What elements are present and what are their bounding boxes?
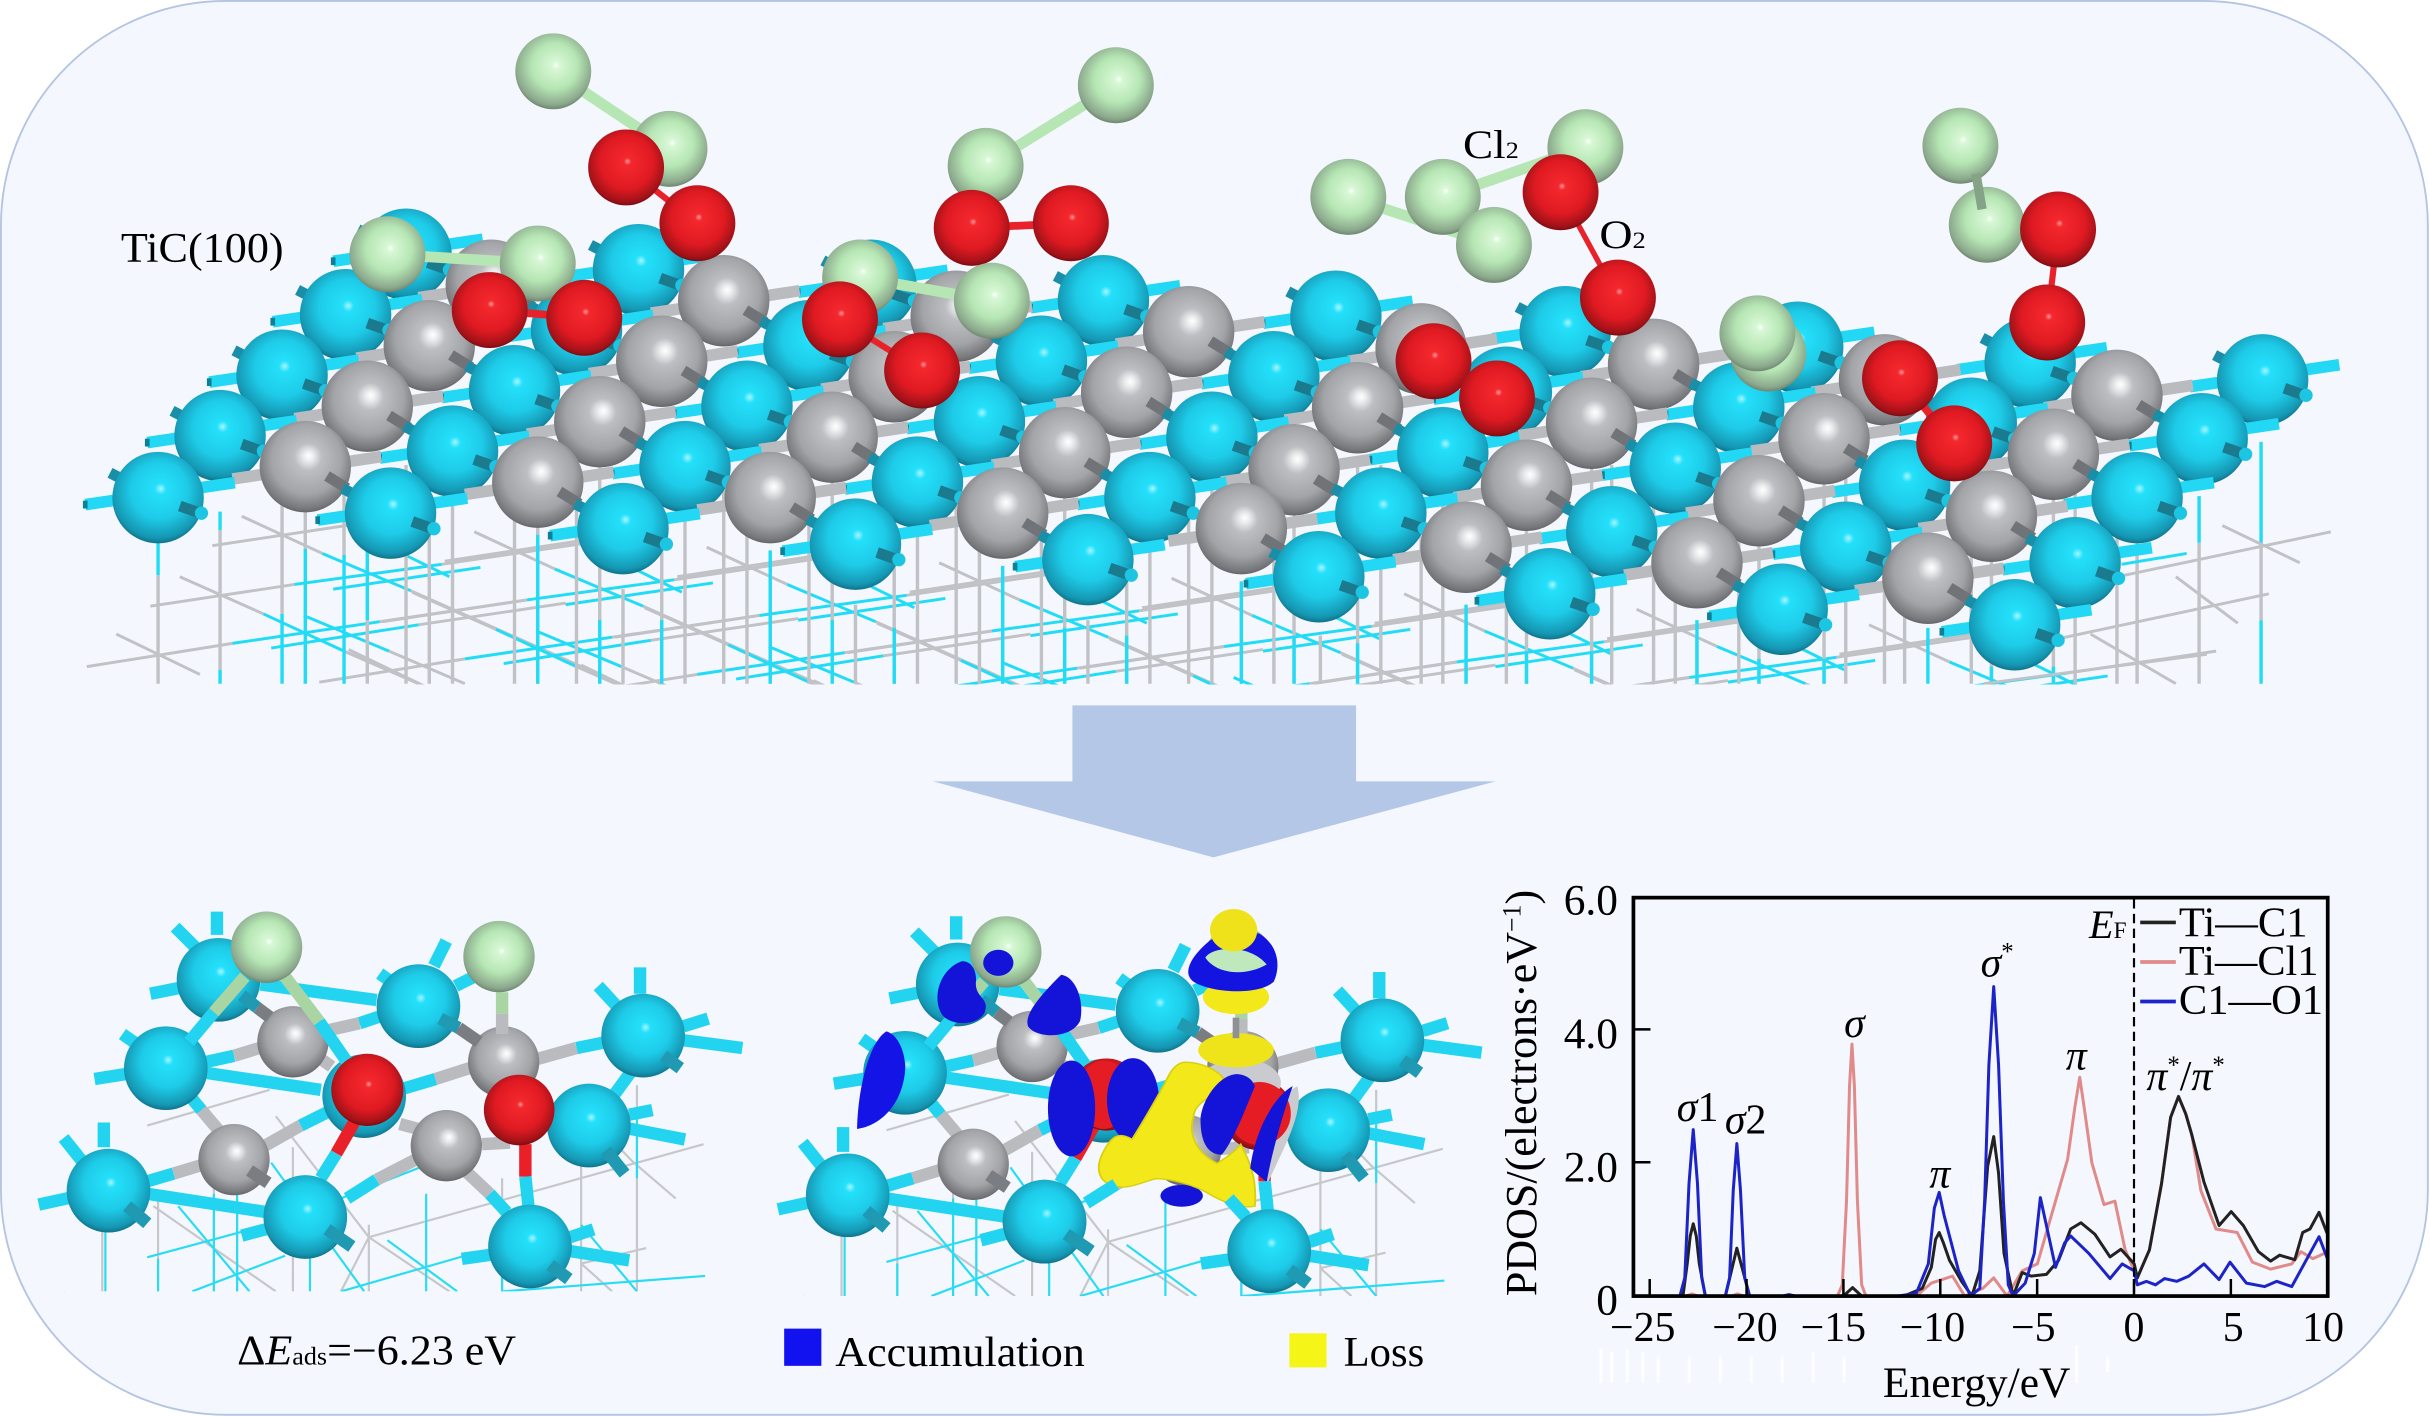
peak labels: [1677, 939, 2225, 1198]
molecule: Cl2 + O2 group 2: [934, 47, 1154, 266]
peak labels: σ2: [1725, 1097, 1766, 1143]
x axis title: Energy/eV: [1883, 1359, 2070, 1407]
y axis title: −1: [1497, 905, 1526, 932]
lattice: TiC(100) surface spheres: [85, 209, 2339, 671]
peak labels: π: [2066, 1034, 2088, 1080]
y axis tick labels: [1564, 877, 1618, 1325]
x axis tick labels: −5: [2011, 1305, 2056, 1351]
atoms: back spheres: [124, 938, 685, 1195]
label: TiC(100): TiC(100): [121, 226, 284, 272]
label: adsorption energy: ΔEads=−6.23 eV: [237, 1328, 516, 1374]
chart frame and ticks: [1633, 898, 2328, 1296]
molecule: Cl2 + O2 group 1: [515, 33, 735, 261]
y axis tick labels: 2.0: [1564, 1143, 1618, 1191]
label: O2: O 2: [1599, 212, 1646, 257]
peak labels: *: [2001, 939, 2014, 966]
structure: charge density copy: [778, 916, 1482, 1307]
legend: accumulation: Accumulation: [835, 1330, 1085, 1376]
x axis tick labels: 5: [2223, 1305, 2244, 1351]
wireframe: subsurface lattice: [86, 442, 2331, 684]
structure: adsorbed configuration: [39, 912, 742, 1302]
molecule: Cl2 + O2 group 3: [349, 216, 622, 356]
legend: Ti-Cl1: Ti—Cl1: [2179, 939, 2318, 985]
y axis tick labels: 0: [1596, 1277, 1618, 1325]
molecule: Cl2 + O2 group 8: [1922, 108, 2096, 360]
legend: C1-O1: C1—O1: [2179, 978, 2323, 1024]
x axis tick labels: −10: [1900, 1305, 1965, 1351]
molecule: O2 group 7: [1862, 340, 1992, 481]
Fermi level label: EF: [2088, 902, 2127, 947]
peak labels: *: [2167, 1052, 2180, 1079]
arrow: downward block arrow: [933, 705, 1496, 857]
isosurface: charge density difference: [857, 909, 1299, 1207]
peak labels: π: [1929, 1152, 1951, 1198]
peak labels: π: [2146, 1054, 2167, 1100]
chart curves: [1650, 987, 2328, 1296]
x axis tick labels: [1610, 1305, 2344, 1351]
peak labels: σ1: [1677, 1085, 1718, 1131]
chart: PDOS: [1496, 877, 2344, 1407]
x axis tick labels: −20: [1712, 1305, 1778, 1351]
peak labels: σ: [1981, 941, 2001, 987]
molecule: Cl2 + O2 group 4: [802, 240, 1030, 409]
peak labels: σ: [1844, 1001, 1866, 1047]
peak labels: /: [2180, 1054, 2192, 1100]
y axis tick labels: 6.0: [1564, 877, 1618, 925]
x axis tick labels: 10: [2302, 1305, 2344, 1351]
x axis tick labels: 0: [2124, 1305, 2144, 1351]
y axis title: ): [1496, 890, 1546, 905]
molecule: Cl2 + O2 group 6: [1396, 295, 1806, 436]
molecule: Cl2 + O2 group 5 (free, labelled): [1310, 109, 1656, 336]
peak labels: π: [2191, 1054, 2212, 1100]
y axis tick labels: 4.0: [1564, 1010, 1618, 1058]
peak labels: *: [2212, 1052, 2225, 1079]
atoms: front spheres: [67, 912, 572, 1288]
label: Cl2: Cl 2: [1463, 122, 1519, 167]
y axis title: PDOS/(electrons·eV: [1496, 924, 1546, 1296]
legend: loss: Loss: [1344, 1330, 1424, 1376]
legend: loss: [1289, 1330, 1424, 1376]
atoms: front cyan spheres over isosurface: [981, 1180, 1368, 1293]
legend: Ti-C1: Ti—C1: [2179, 900, 2308, 946]
x axis tick labels: −15: [1801, 1305, 1866, 1351]
x axis tick labels: −25: [1610, 1305, 1675, 1351]
